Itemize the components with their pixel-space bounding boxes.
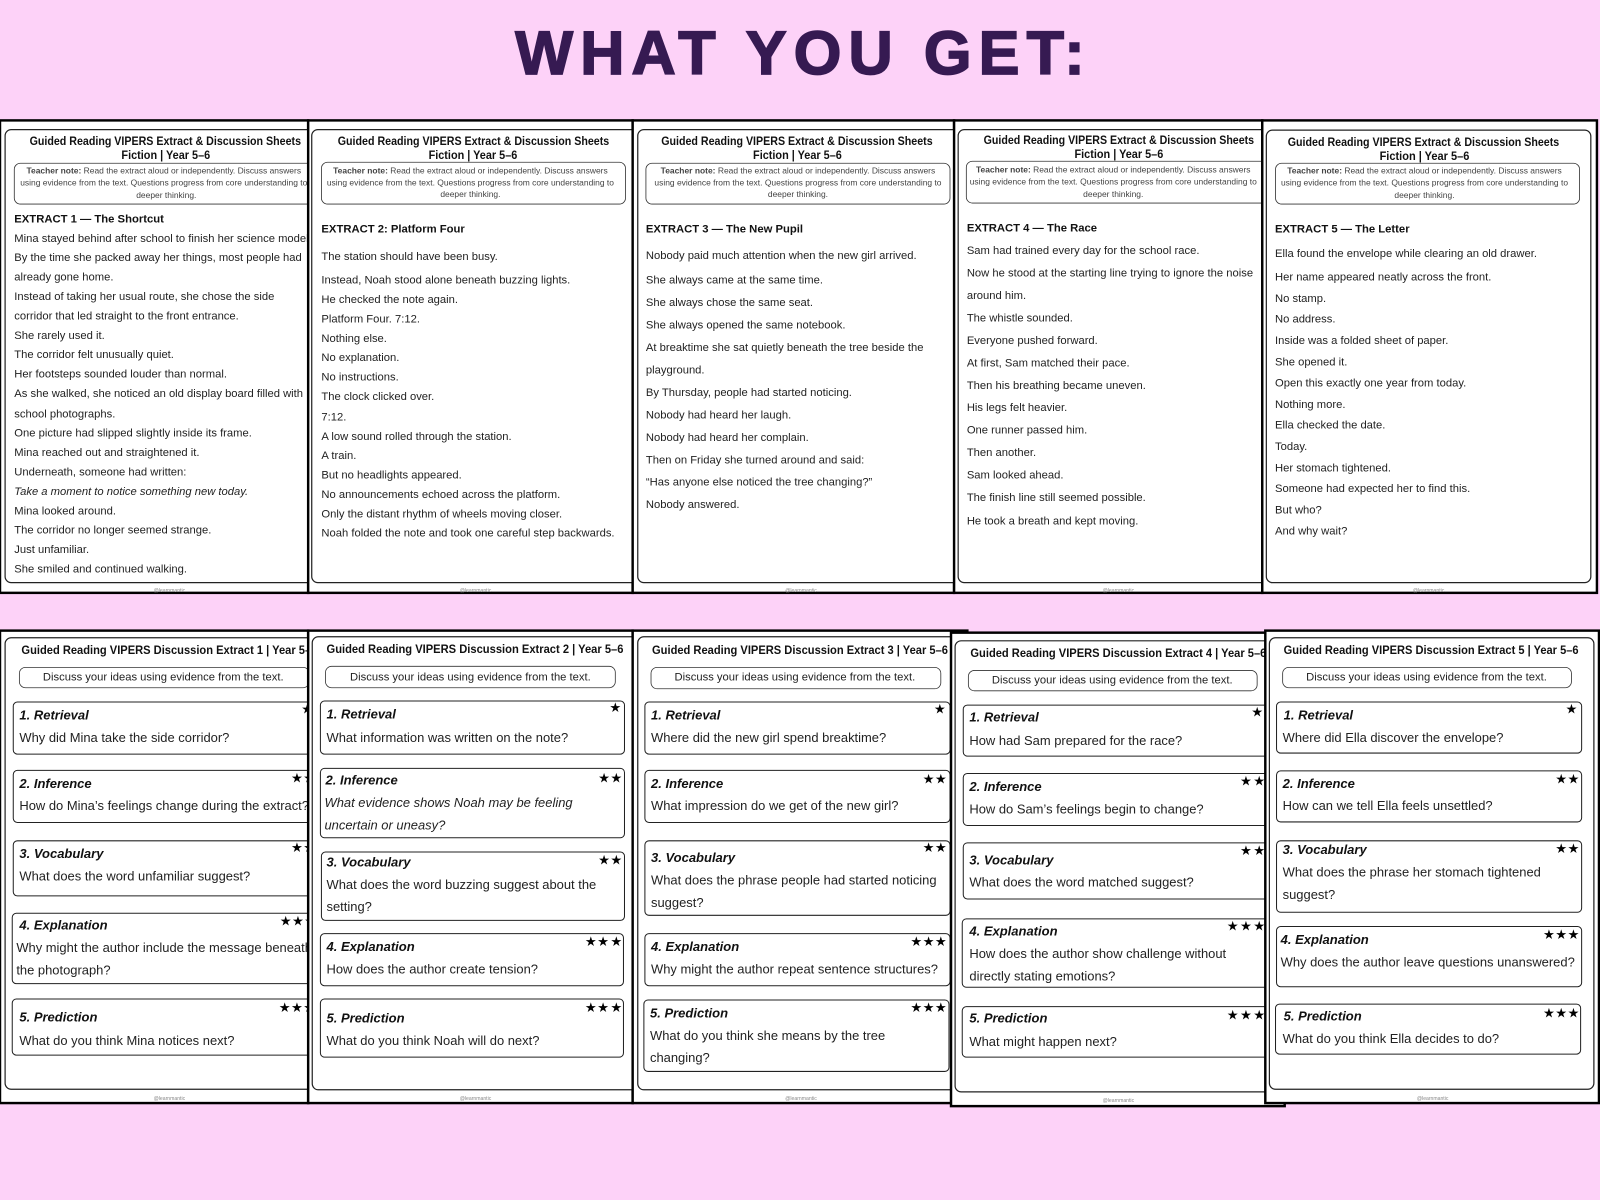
question 2 inference: ★★ [1240, 775, 1265, 790]
sheet 4 extract text: He took a breath and kept moving. [967, 515, 1138, 527]
question 5 prediction [320, 999, 623, 1057]
sheet 2 teacher note: deeper thinking. [440, 189, 500, 199]
question 4 explanation [12, 912, 307, 984]
question 5 prediction [12, 998, 307, 1056]
question 2 inference: ★★ [1555, 773, 1580, 788]
sheet 1 extract text: Underneath, someone had written: [14, 467, 186, 479]
question 1 retrieval: ★ [301, 702, 313, 717]
sheet 5 header [1288, 137, 1559, 162]
question 2 inference: What evidence shows Noah may be feeling [324, 795, 573, 810]
question 3 vocabulary: ★★ [291, 841, 315, 856]
panel: discussion sheet 5 [1265, 631, 1599, 1103]
question 1 retrieval: 1. Retrieval [19, 707, 89, 722]
discussion 5 prompt [1283, 667, 1571, 688]
sheet 5 teacher note: Teacher note: Read the extract aloud or independently. Discuss answers [1287, 165, 1562, 175]
question 2 inference: ★★ [598, 772, 622, 787]
question 5 prediction [1276, 1004, 1581, 1054]
sheet 1 teacher note: Teacher note: Read the extract aloud or independently. Discuss answers [26, 165, 301, 175]
sheet 4 teacher note: Teacher note: Read the extract aloud or independently. Discuss answers [976, 164, 1251, 174]
sheet 5 footer: @learnmantic [1413, 588, 1445, 594]
sheet 3 teacher note [646, 163, 950, 204]
sheet 1 footer: @learnmantic [154, 588, 186, 594]
question 2 inference: How do Sam’s feelings begin to change? [969, 801, 1204, 816]
sheet 2 extract text: Only the distant rhythm of wheels moving closer. [321, 508, 562, 520]
sheet 4 extract text: Then his breathing became uneven. [967, 380, 1146, 392]
sheet 1 extract text: By the time she packed away her things, most people had [14, 252, 302, 264]
question 1 retrieval: ★ [1565, 702, 1577, 717]
question 1 retrieval: 1. Retrieval [327, 706, 396, 721]
sheet 1 extract text: The corridor no longer seemed strange. [14, 525, 211, 537]
question 3 vocabulary: What does the phrase people had started noticing [651, 873, 937, 888]
question 5 prediction: What do you think she means by the tree [650, 1028, 885, 1043]
sheet 1 extract text: As she walked, she noticed an old display board filled with [14, 388, 303, 400]
question 5 prediction: 5. Prediction [19, 1009, 97, 1024]
question 4 explanation: 4. Explanation [968, 924, 1058, 939]
sheet 1 extract text: She rarely used it. [14, 330, 105, 342]
sheet 3 extract text: At breaktime she sat quietly beneath the tree beside the [646, 342, 923, 354]
question 5 prediction: What might happen next? [969, 1034, 1117, 1049]
question 3 vocabulary: What does the word matched suggest? [969, 875, 1194, 890]
question 4 explanation: Why might the author repeat sentence structures? [651, 961, 938, 976]
sheet 3 header [662, 136, 932, 162]
sheet 2 extract text: A low sound rolled through the station. [321, 431, 512, 443]
question 1 retrieval [1277, 702, 1582, 753]
sheet 5 extract text: Someone had expected her to find this. [1275, 483, 1470, 495]
discussion 2 prompt [326, 666, 615, 688]
discussion 3 prompt [651, 667, 941, 689]
question 4 explanation: ★★★ [910, 935, 947, 950]
sheet 3 extract text: She always opened the same notebook. [646, 320, 846, 332]
sheet 2 extract text: Noah folded the note and took one careful step backwards. [321, 528, 615, 540]
sheet 4 extract text: Sam had trained every day for the school race. [967, 245, 1199, 257]
question 2 inference [645, 770, 950, 822]
sheet 4 extract text: At first, Sam matched their pace. [967, 357, 1130, 369]
sheet 2 extract text [321, 251, 615, 540]
question 4 explanation: 4. Explanation [650, 939, 739, 954]
discussion 1 prompt [19, 667, 309, 688]
sheet 5 extract text: Inside was a folded sheet of paper. [1275, 335, 1448, 347]
sheet 3 extract text: Nobody had heard her complain. [646, 432, 809, 444]
sheet 2 extract text: The station should have been busy. [321, 251, 498, 263]
discussion 3 footer: @learnmantic [785, 1096, 817, 1102]
discussion 4 footer: @learnmantic [1103, 1098, 1135, 1104]
discussion 3 prompt: Discuss your ideas using evidence from the text. [675, 672, 915, 684]
sheet 4 extract text: around him. [967, 290, 1026, 302]
sheet 1 extract text: Mina stayed behind after school to finish her science model. [14, 233, 312, 245]
sheet 3 extract text: Nobody answered. [646, 499, 739, 511]
question 2 inference [963, 773, 1300, 826]
sheet 1 extract text: Mina looked around. [14, 505, 116, 517]
discussion 2 prompt: Discuss your ideas using evidence from the text. [350, 672, 591, 684]
sheet 1 extract text: Instead of taking her usual route, she chose the side [14, 291, 274, 303]
discussion 5 footer: @learnmantic [1417, 1096, 1449, 1102]
sheet 1 extract text: Her footsteps sounded louder than normal. [14, 369, 227, 381]
sheet 1 extract text: school photographs. [14, 408, 115, 420]
question 4 explanation: How does the author create tension? [327, 961, 538, 976]
sheet 5 header: Fiction | Year 5–6 [1380, 149, 1470, 163]
sheet 1 extract text: already gone home. [14, 272, 113, 284]
question 4 explanation: ★★★ [1227, 920, 1265, 935]
question 4 explanation: How does the author show challenge without [969, 946, 1227, 961]
sheet 1 header [30, 136, 301, 162]
sheet 4 header [984, 135, 1254, 160]
question 2 inference [1277, 771, 1582, 822]
panel: discussion sheet 4 [951, 633, 1302, 1106]
question 3 vocabulary: ★★ [1555, 842, 1580, 857]
question 5 prediction: 5. Prediction [969, 1010, 1047, 1025]
sheet 5 extract text: She opened it. [1275, 356, 1347, 368]
sheet 1 extract heading: EXTRACT 1 — The Shortcut [14, 213, 164, 225]
question 5 prediction: What do you think Ella decides to do? [1283, 1031, 1499, 1046]
question 3 vocabulary [1277, 841, 1582, 912]
sheet 1 extract text: She smiled and continued walking. [14, 563, 187, 575]
discussion 5 header: Guided Reading VIPERS Discussion Extract 5 | Year 5–6 [1284, 643, 1579, 657]
sheet 1 header: Guided Reading VIPERS Extract & Discussion Sheets [30, 134, 301, 148]
sheet 2 extract text: No explanation. [321, 352, 399, 364]
sheet 5 extract text: Nothing more. [1275, 399, 1345, 411]
panel: extract sheet 5 [1262, 120, 1597, 594]
question 3 vocabulary: suggest? [1283, 887, 1335, 902]
sheet 4 extract text: Now he stood at the starting line trying to ignore the noise [967, 268, 1253, 280]
sheet 2 extract text: 7:12. [321, 411, 346, 423]
sheet 4 extract text: The finish line still seemed possible. [967, 492, 1146, 504]
sheet 3 extract text: Then on Friday she turned around and said: [646, 454, 864, 466]
question 3 vocabulary: ★★ [598, 853, 622, 868]
question 2 inference: ★★ [923, 773, 947, 788]
question 2 inference: 2. Inference [18, 776, 92, 791]
sheet 2 extract text: But no headlights appeared. [321, 470, 462, 482]
question 2 inference: How do Mina’s feelings change during the extract? [19, 798, 309, 813]
sheet 2 header [338, 136, 609, 162]
sheet 5 extract text: And why wait? [1275, 526, 1347, 538]
question 5 prediction: What do you think Noah will do next? [327, 1033, 539, 1048]
discussion 2 footer: @learnmantic [460, 1096, 492, 1102]
sheet 5 extract text: But who? [1275, 504, 1322, 516]
question 3 vocabulary: What does the word unfamiliar suggest? [19, 869, 250, 884]
question 1 retrieval: 1. Retrieval [651, 707, 721, 722]
question 5 prediction: ★★★ [910, 1001, 947, 1016]
discussion 1 footer: @learnmantic [154, 1096, 186, 1102]
sheet 4 extract text: Everyone pushed forward. [967, 335, 1098, 347]
discussion 4 header: Guided Reading VIPERS Discussion Extract 4 | Year 5–6 [970, 646, 1267, 660]
question 1 retrieval: Where did Ella discover the envelope? [1283, 730, 1503, 745]
panel: extract sheet 4 [952, 119, 1264, 594]
sheet 2 header: Guided Reading VIPERS Extract & Discussion Sheets [338, 134, 610, 148]
sheet 2 extract text: No instructions. [321, 372, 399, 384]
question 1 retrieval [12, 702, 307, 755]
sheet 1 extract text: Just unfamiliar. [14, 544, 89, 556]
discussion 4 prompt [968, 670, 1257, 691]
sheet 5 extract text: Her stomach tightened. [1275, 462, 1391, 474]
sheet 5 teacher note [1276, 163, 1580, 204]
sheet 1 extract text: One picture had slipped slightly inside its frame. [14, 428, 252, 440]
question 1 retrieval: Why did Mina take the side corridor? [19, 730, 229, 745]
sheet 2 extract text: No announcements echoed across the platform. [321, 489, 560, 501]
sheet 4 extract text: Sam looked ahead. [967, 470, 1064, 482]
question 3 vocabulary: 3. Vocabulary [651, 850, 736, 865]
question 3 vocabulary [321, 852, 624, 920]
sheet 5 extract text: Today. [1275, 441, 1307, 453]
sheet 5 extract text: Ella checked the date. [1275, 420, 1385, 432]
discussion 1 header: Guided Reading VIPERS Discussion Extract 1 | Year 5–6 [21, 643, 318, 657]
question 4 explanation [962, 919, 1299, 987]
sheet 1 header: Fiction | Year 5–6 [121, 148, 211, 162]
question 5 prediction: 5. Prediction [327, 1010, 405, 1025]
sheet 4 teacher note: using evidence from the text. Questions progress from core understanding to [970, 177, 1257, 187]
question 3 vocabulary [12, 840, 307, 896]
question 3 vocabulary: 3. Vocabulary [969, 852, 1054, 867]
question 1 retrieval: ★ [1251, 705, 1263, 720]
sheet 4 extract text [967, 245, 1253, 527]
sheet 1 teacher note: deeper thinking. [136, 190, 196, 200]
sheet 5 extract text [1275, 248, 1537, 538]
question 5 prediction: 5. Prediction [650, 1005, 728, 1020]
question 5 prediction: ★★★ [1543, 1006, 1580, 1021]
sheet 1 teacher note [14, 163, 320, 204]
question 3 vocabulary: 3. Vocabulary [327, 854, 411, 869]
sheet 3 teacher note: using evidence from the text. Questions progress from core understanding to [654, 178, 942, 188]
sheet 4 extract text: Then another. [967, 447, 1036, 459]
sheet 2 extract heading: EXTRACT 2: Platform Four [321, 224, 465, 236]
sheet 1 extract text [14, 233, 312, 575]
sheet 1 teacher note: using evidence from the text. Questions progress from core understanding to [20, 178, 308, 188]
question 2 inference: 2. Inference [1282, 776, 1355, 791]
sheet 3 teacher note: Teacher note: Read the extract aloud or independently. Discuss answers [661, 165, 935, 175]
question 5 prediction: ★★★ [279, 1001, 315, 1016]
panel: extract sheet 3 [633, 120, 985, 594]
sheet 5 extract text: Ella found the envelope while clearing an old drawer. [1275, 248, 1537, 260]
discussion 3 header: Guided Reading VIPERS Discussion Extract 3 | Year 5–6 [652, 643, 948, 657]
sheet 3 header: Guided Reading VIPERS Extract & Discussion Sheets [661, 134, 933, 148]
question 3 vocabulary: ★★ [1240, 844, 1265, 859]
discussion 2 header: Guided Reading VIPERS Discussion Extract 2 | Year 5–6 [327, 642, 624, 656]
question 1 retrieval: ★ [934, 702, 946, 717]
sheet 2 teacher note [321, 162, 626, 204]
question 4 explanation: ★★★ [1543, 928, 1580, 943]
question 1 retrieval: What information was written on the note? [327, 730, 568, 745]
question 5 prediction: ★★★ [585, 1001, 622, 1016]
question 5 prediction: 5. Prediction [1284, 1008, 1362, 1023]
question 1 retrieval: Where did the new girl spend breaktime? [651, 730, 886, 745]
sheet 1 extract text: Take a moment to notice something new today. [14, 486, 248, 498]
panel: discussion sheet 2 [308, 631, 659, 1103]
question 3 vocabulary: suggest? [651, 895, 704, 910]
sheet 2 extract text: A train. [321, 450, 356, 462]
question 3 vocabulary: 3. Vocabulary [1283, 842, 1367, 857]
sheet 3 footer: @learnmantic [785, 588, 817, 594]
question 4 explanation: the photograph? [16, 962, 111, 977]
sheet 2 extract text: Nothing else. [321, 333, 387, 345]
sheet 2 extract text: He checked the note again. [321, 294, 458, 306]
question 5 prediction [644, 1000, 949, 1071]
question 4 explanation: directly stating emotions? [969, 969, 1115, 984]
question 2 inference: 2. Inference [650, 776, 723, 791]
sheet 5 extract text: No stamp. [1275, 293, 1326, 305]
sheet 3 extract text: By Thursday, people had started noticing. [646, 387, 852, 399]
sheet 5 teacher note: deeper thinking. [1394, 190, 1455, 200]
sheet 2 teacher note: Teacher note: Read the extract aloud or independently. Discuss answers [333, 165, 608, 175]
sheet 3 extract heading: EXTRACT 3 — The New Pupil [646, 224, 803, 236]
question 4 explanation: Why might the author include the message beneath [16, 940, 312, 955]
question 1 retrieval: How had Sam prepared for the race? [969, 733, 1182, 748]
question 1 retrieval [963, 705, 1300, 756]
question 2 inference [320, 768, 624, 838]
sheet 1 extract text: The corridor felt unusually quiet. [14, 349, 174, 361]
question 4 explanation: 4. Explanation [1280, 932, 1369, 947]
question 3 vocabulary: 3. Vocabulary [19, 846, 104, 861]
sheet 4 footer: @learnmantic [1103, 588, 1135, 594]
question 2 inference: 2. Inference [968, 779, 1042, 794]
question 3 vocabulary: ★★ [923, 841, 947, 856]
question 3 vocabulary [645, 841, 950, 915]
question 2 inference: uncertain or uneasy? [324, 818, 446, 833]
question 5 prediction [962, 1007, 1299, 1057]
sheet 4 header: Guided Reading VIPERS Extract & Discussion Sheets [984, 133, 1254, 147]
sheet 2 footer: @learnmantic [460, 588, 492, 594]
question 4 explanation: Why does the author leave questions unanswered? [1281, 954, 1575, 969]
question 3 vocabulary [963, 843, 1300, 899]
panel: extract sheet 2 [308, 120, 659, 594]
sheet 4 teacher note [966, 161, 1283, 203]
discussion 1 prompt: Discuss your ideas using evidence from the text. [43, 672, 284, 684]
question 3 vocabulary: What does the word buzzing suggest about the [327, 877, 596, 892]
question 1 retrieval: 1. Retrieval [969, 709, 1039, 724]
panel: discussion sheet 1 [0, 629, 310, 1104]
panel: discussion sheet 3 [633, 631, 985, 1103]
sheet 5 extract text: Her name appeared neatly across the front. [1275, 272, 1491, 284]
sheet 2 extract text: The clock clicked over. [321, 391, 434, 403]
question 3 vocabulary: What does the phrase her stomach tightened [1283, 865, 1541, 880]
discussion 5 prompt: Discuss your ideas using evidence from the text. [1306, 672, 1547, 684]
question 1 retrieval: 1. Retrieval [1284, 707, 1353, 722]
question 4 explanation: 4. Explanation [18, 918, 108, 933]
question 5 prediction: changing? [650, 1050, 710, 1065]
question 4 explanation: ★★★ [280, 915, 316, 930]
question 2 inference: ★★ [291, 772, 315, 787]
question 1 retrieval [645, 702, 950, 754]
sheet 1 extract text: corridor that led straight to the front entrance. [14, 310, 239, 322]
sheet 3 extract text: Nobody had heard her laugh. [646, 409, 791, 421]
sheet 2 teacher note: using evidence from the text. Questions progress from core understanding to [327, 178, 614, 188]
question 4 explanation: 4. Explanation [326, 939, 415, 954]
sheet 3 header: Fiction | Year 5–6 [753, 148, 842, 162]
sheet 5 extract heading: EXTRACT 5 — The Letter [1275, 224, 1410, 236]
sheet 3 extract text: She always came at the same time. [646, 275, 823, 287]
panel: extract sheet 1 [0, 119, 310, 594]
sheet 5 header: Guided Reading VIPERS Extract & Discussion Sheets [1288, 135, 1560, 149]
question 1 retrieval [320, 701, 624, 754]
sheet 2 extract text: Platform Four. 7:12. [321, 313, 420, 325]
question 2 inference: 2. Inference [325, 773, 398, 788]
sheet 5 extract text: Open this exactly one year from today. [1275, 378, 1466, 390]
sheet 1 extract text: Mina reached out and straightened it. [14, 447, 200, 459]
sheet 4 header: Fiction | Year 5–6 [1074, 147, 1164, 161]
sheet 3 extract text: She always chose the same seat. [646, 297, 813, 309]
discussion 4 prompt: Discuss your ideas using evidence from the text. [992, 675, 1233, 687]
question 1 retrieval: ★ [609, 701, 621, 716]
sheet 5 teacher note: using evidence from the text. Questions progress from core understanding to [1281, 178, 1568, 188]
question 2 inference: What impression do we get of the new girl? [651, 798, 898, 813]
sheet 2 header: Fiction | Year 5–6 [429, 148, 518, 162]
question 5 prediction: What do you think Mina notices next? [19, 1033, 234, 1048]
sheet 3 extract text: Nobody paid much attention when the new girl arrived. [646, 250, 917, 262]
sheet 4 extract heading: EXTRACT 4 — The Race [967, 223, 1097, 235]
sheet 3 extract text: playground. [646, 364, 705, 376]
sheet 5 extract text: No address. [1275, 313, 1336, 325]
sheet 3 teacher note: deeper thinking. [768, 189, 828, 199]
question 5 prediction: ★★★ [1227, 1008, 1265, 1023]
question 4 explanation [320, 934, 623, 986]
question 3 vocabulary: setting? [327, 899, 372, 914]
sheet 4 extract text: His legs felt heavier. [967, 402, 1067, 414]
title: WHAT YOU GET: [515, 19, 1085, 87]
question 4 explanation: ★★★ [585, 935, 622, 950]
sheet 4 teacher note: deeper thinking. [1083, 189, 1143, 199]
sheet 3 extract text: “Has anyone else noticed the tree changing?” [646, 477, 873, 489]
sheet 4 extract text: One runner passed him. [967, 425, 1087, 437]
question 4 explanation [645, 934, 950, 986]
question 2 inference: How can we tell Ella feels unsettled? [1283, 798, 1493, 813]
sheet 3 extract text [646, 250, 923, 511]
sheet 2 extract text: Instead, Noah stood alone beneath buzzing lights. [321, 275, 570, 287]
sheet 4 extract text: The whistle sounded. [967, 312, 1073, 324]
question 2 inference [12, 770, 307, 823]
question 4 explanation [1277, 927, 1582, 987]
